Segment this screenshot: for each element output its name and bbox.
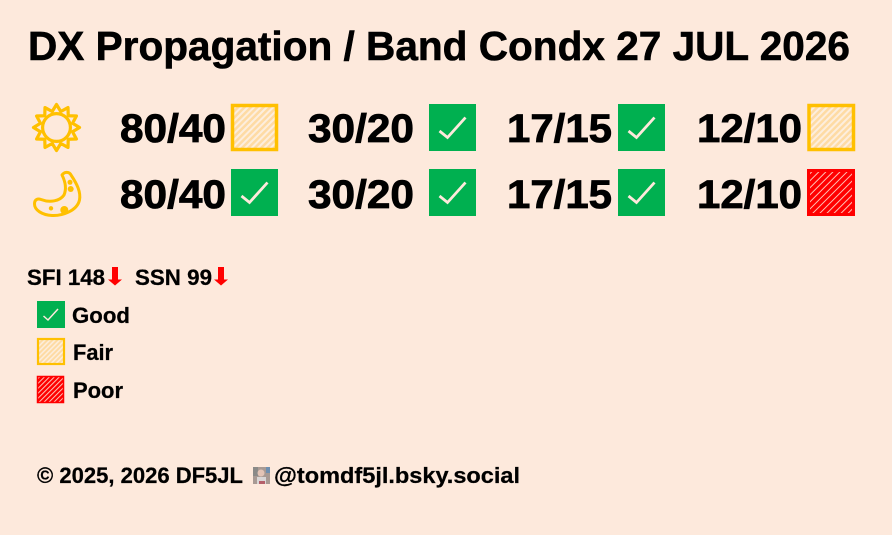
row: day conditions xyxy=(120,104,854,151)
label: 17/15 night: 17/15 xyxy=(507,173,612,217)
arrow: SSN down xyxy=(214,267,228,286)
title: DX Propagation / Band Condx 27 JUL 2026 xyxy=(28,23,850,69)
icon: avatar photo xyxy=(253,467,270,484)
legend: poor: Poor xyxy=(73,378,123,403)
status: poor xyxy=(808,170,854,214)
copyright: © 2025, 2026 DF5JL xyxy=(37,463,243,488)
label: 30/20 day: 30/20 xyxy=(308,107,414,151)
label: 80/40 night: 80/40 xyxy=(120,173,226,217)
status: good xyxy=(618,104,665,151)
icon: moon xyxy=(34,172,80,216)
legend: good: Good xyxy=(72,303,130,328)
footer xyxy=(37,463,520,488)
status: good xyxy=(429,104,476,151)
status: good xyxy=(429,169,476,216)
label: 17/15 day: 17/15 xyxy=(507,107,612,151)
label: 12/10 day: 12/10 xyxy=(697,107,802,151)
SFI value: SFI 148 xyxy=(27,265,105,290)
status: good xyxy=(618,169,665,216)
status: fair xyxy=(809,106,854,150)
label: 12/10 night: 12/10 xyxy=(697,173,802,217)
icon: sun xyxy=(33,104,80,151)
SSN value: SSN 99 xyxy=(135,265,212,290)
status: good xyxy=(231,169,278,216)
arrow: SFI down xyxy=(108,267,122,286)
label: 80/40 day: 80/40 xyxy=(120,107,226,151)
status: fair xyxy=(232,106,276,150)
label: 30/20 night: 30/20 xyxy=(308,173,414,217)
legend: fair: Fair xyxy=(73,340,113,365)
solar indices xyxy=(27,265,228,290)
handle: @tomdf5jl.bsky.social xyxy=(274,463,520,488)
legend xyxy=(37,301,130,403)
row: night conditions xyxy=(120,169,854,217)
